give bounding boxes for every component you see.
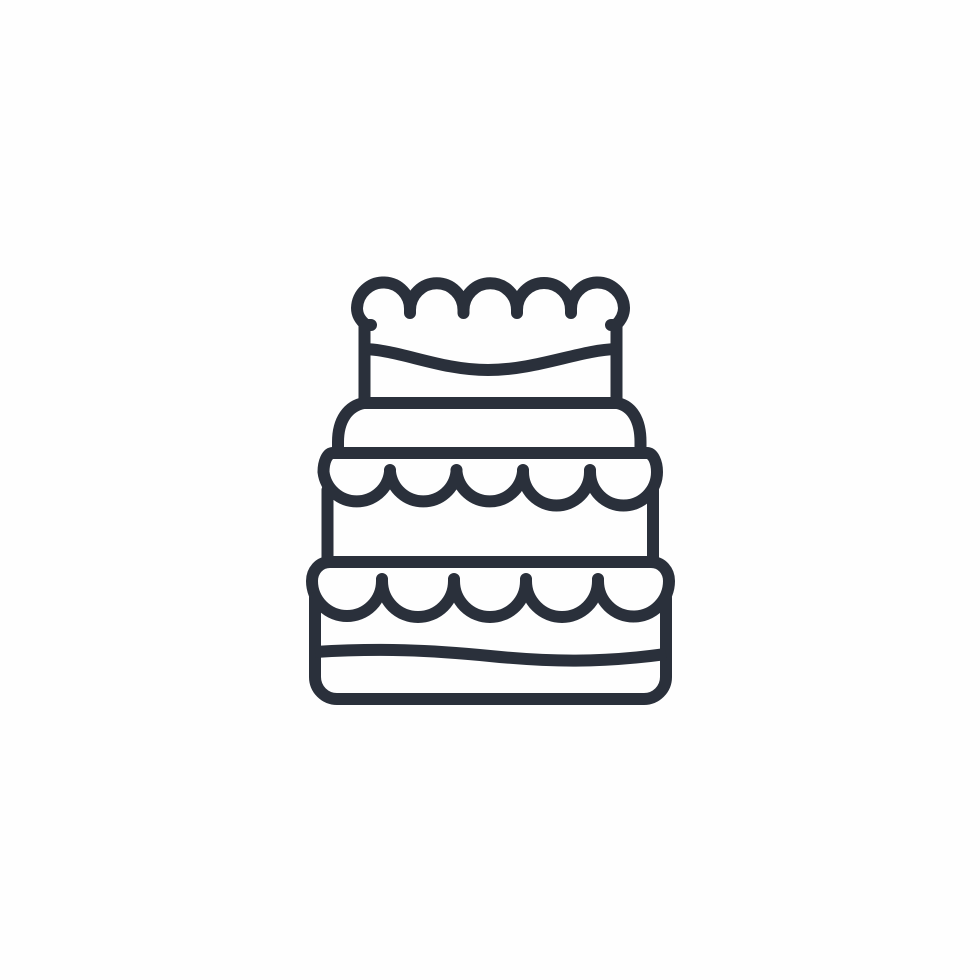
middle tier frill xyxy=(324,453,657,506)
bottom tier frill xyxy=(312,562,669,617)
icon: three-tier cake xyxy=(312,282,669,699)
bottom tier wave xyxy=(315,650,666,661)
bottom tier body xyxy=(315,598,666,699)
top tier wave xyxy=(364,349,616,370)
top tier body xyxy=(364,325,616,403)
middle tier body xyxy=(328,490,653,562)
middle dome xyxy=(338,403,640,453)
top tier scalloped icing xyxy=(357,282,624,325)
